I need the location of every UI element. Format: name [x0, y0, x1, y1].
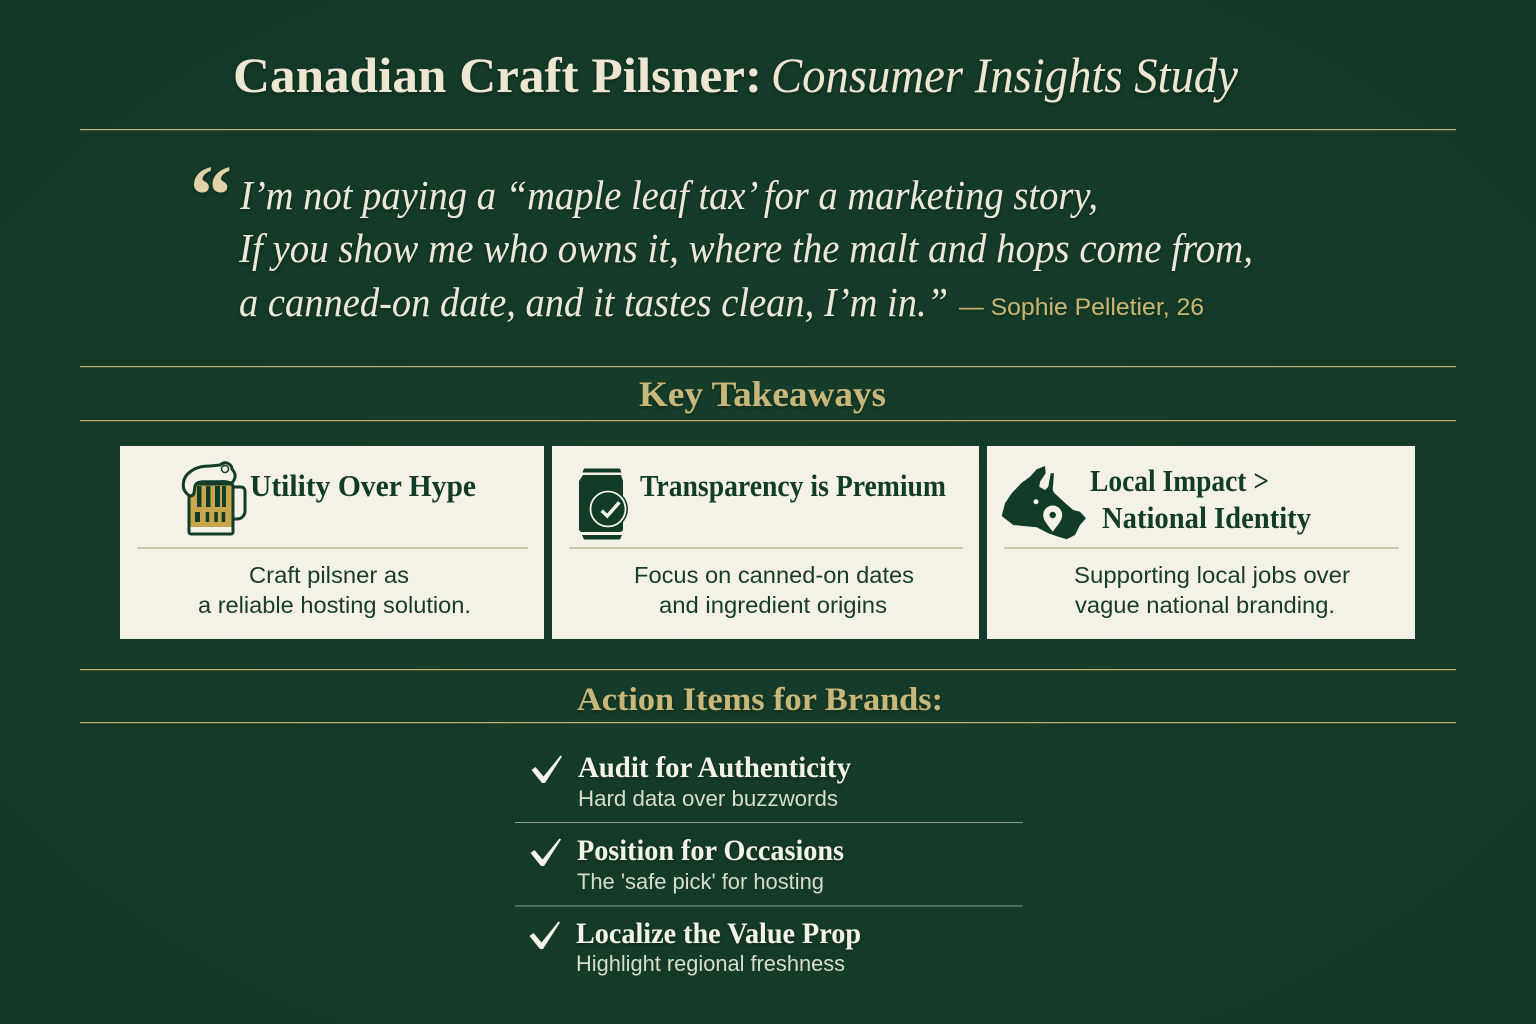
- card text: [1074, 562, 1350, 618]
- panel: utility over hype: [120, 446, 544, 639]
- card heading: Utility Over Hype: [250, 468, 476, 503]
- card heading: National Identity: [1102, 500, 1311, 535]
- action item: audit: [532, 751, 851, 811]
- title: Consumer Insights Study: [771, 47, 1239, 103]
- quote: If you show me who owns it, where the malt and hops come from,: [238, 225, 1253, 271]
- action item: position: Position for Occasions: [577, 834, 844, 867]
- card text: Supporting local jobs over: [1074, 562, 1350, 588]
- action item: position: The 'safe pick' for hosting: [577, 869, 824, 894]
- title: [233, 47, 1239, 103]
- icon: can with check: [579, 468, 628, 540]
- icon: check: [532, 756, 562, 783]
- action item: audit: Audit for Authenticity: [578, 751, 851, 784]
- quote: — Sophie Pelletier, 26: [959, 294, 1204, 321]
- panel: transparency is premium: [552, 446, 979, 639]
- card text: Focus on canned-on dates: [634, 562, 914, 588]
- title: Canadian Craft Pilsner:: [233, 47, 762, 103]
- card heading: Local Impact >: [1090, 463, 1269, 498]
- card heading: Transparency is Premium: [640, 468, 946, 503]
- card text: Craft pilsner as: [249, 562, 409, 588]
- heading: action items: Action Items for Brands:: [577, 682, 943, 718]
- card text: [198, 562, 471, 618]
- icon: check: [530, 922, 560, 949]
- card text: a reliable hosting solution.: [198, 592, 471, 618]
- quote: a canned-on date, and it tastes clean, I’m in.”: [239, 279, 948, 325]
- quote: I’m not paying a “maple leaf tax’ for a marketing story,: [239, 172, 1098, 218]
- action item: localize: Localize the Value Prop: [576, 917, 861, 950]
- icon: canada map with pin: [1002, 466, 1086, 539]
- action item: localize: [530, 917, 861, 976]
- card text: [634, 562, 914, 618]
- card text: vague national branding.: [1075, 592, 1335, 618]
- action item: position: [530, 834, 844, 894]
- panel: local impact: [987, 446, 1415, 639]
- quote: [190, 149, 1253, 325]
- icon: quotation mark: “: [190, 149, 232, 242]
- heading: key takeaways: Key Takeaways: [639, 374, 886, 414]
- card heading: [1090, 463, 1311, 535]
- card text: and ingredient origins: [659, 592, 887, 618]
- icon: beer mug: [183, 463, 245, 534]
- icon: check: [530, 838, 561, 866]
- action item: audit: Hard data over buzzwords: [578, 786, 838, 811]
- action item: localize: Highlight regional freshness: [576, 951, 845, 976]
